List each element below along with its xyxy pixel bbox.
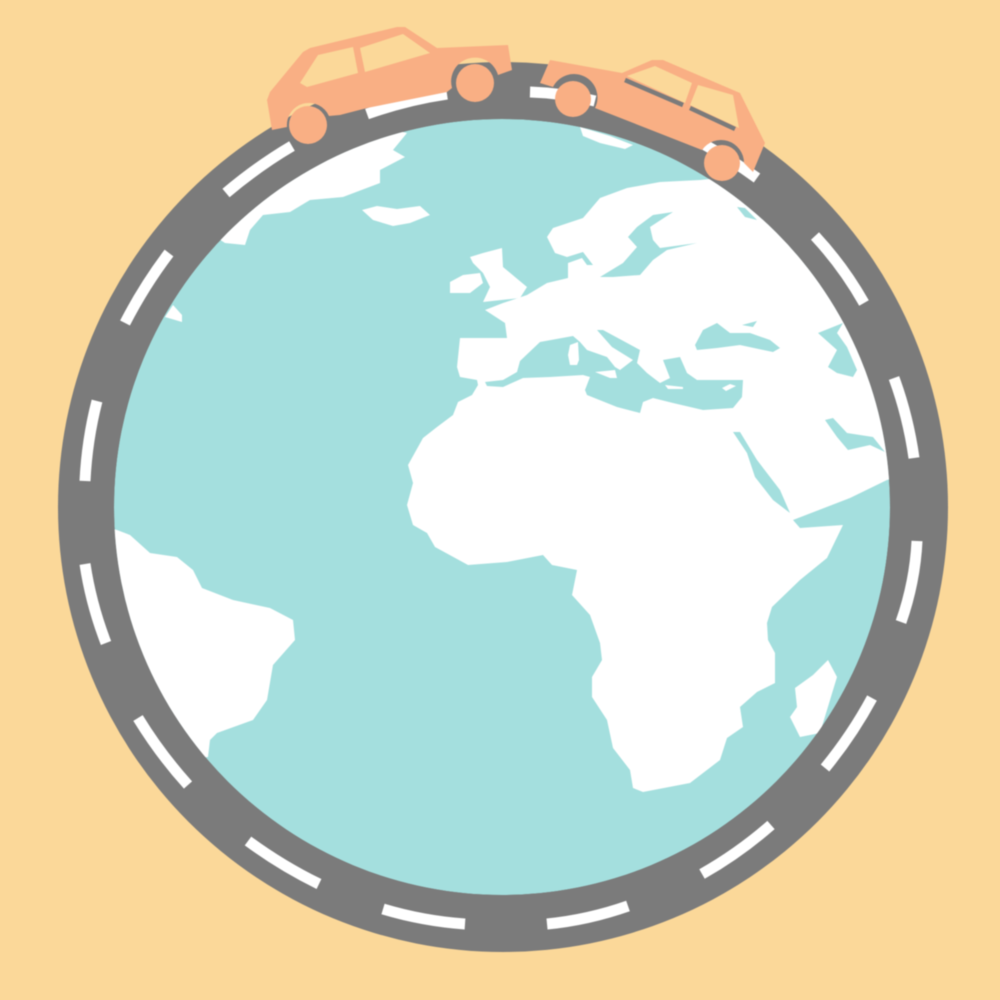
Cyprus [722, 384, 736, 391]
car body [267, 27, 512, 130]
car body [540, 60, 765, 172]
Svalbard [580, 127, 633, 149]
White Sea [737, 207, 757, 220]
South America [114, 529, 296, 758]
Sea of Azov [742, 321, 757, 327]
car: left [267, 27, 512, 144]
Ireland [450, 273, 483, 293]
window shadows [625, 80, 735, 129]
Mediterranean Sea [485, 330, 743, 413]
Sardinia and Corsica [568, 342, 579, 365]
car windows [300, 34, 430, 87]
Persian Gulf [825, 418, 885, 452]
Baltic Sea [600, 212, 697, 277]
circular road [58, 62, 948, 952]
globe [100, 115, 950, 895]
car windows [627, 66, 739, 128]
Red Sea [733, 432, 790, 513]
Crete [665, 385, 683, 389]
Sicily [595, 370, 617, 378]
Afro-Eurasia land [406, 178, 890, 792]
car wheels [289, 64, 494, 144]
Greenland [220, 132, 408, 246]
road lane dashes [85, 92, 917, 924]
Caribbean island [165, 305, 182, 322]
Madagascar [790, 660, 837, 737]
car: right [540, 60, 765, 181]
Great Britain [470, 248, 527, 302]
Iceland [362, 206, 430, 226]
car wheels [555, 81, 740, 181]
ocean [114, 119, 890, 895]
Black Sea [695, 323, 780, 352]
Caspian Sea [818, 323, 857, 377]
